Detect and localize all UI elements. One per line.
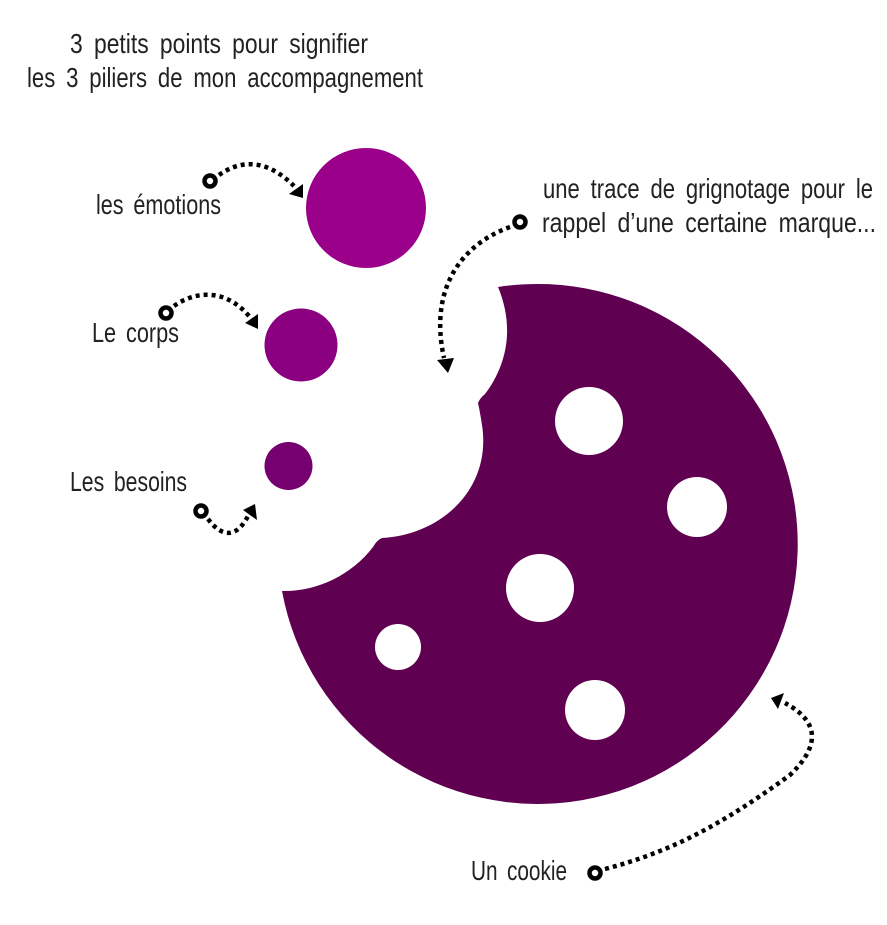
arrow: un cookie (590, 693, 812, 878)
dot: le corps (264, 308, 338, 382)
cookie hole 3 (506, 554, 574, 622)
label: un cookie: Un cookie (471, 855, 567, 886)
cookie hole 2 (667, 477, 727, 537)
dot: les émotions (306, 148, 426, 268)
arrow: le corps (160, 295, 258, 329)
cookie (282, 284, 798, 804)
title: les 3 piliers de mon accompagnement (27, 62, 423, 93)
arrow: les besoins (196, 504, 257, 533)
dot: les besoins (264, 442, 312, 490)
arrow: les émotions (204, 164, 303, 198)
cookie hole 5 (565, 680, 625, 740)
label: les émotions: les émotions (96, 189, 221, 220)
label: trace de grignotage (542, 173, 876, 238)
label: les besoins: Les besoins (70, 466, 187, 497)
label: le corps: Le corps (92, 317, 179, 348)
title (27, 28, 423, 93)
arrow: trace de grignotage (437, 216, 526, 373)
cookie hole 1 (555, 387, 623, 455)
cookie hole 4 (375, 624, 421, 670)
title: 3 petits points pour signifier (70, 28, 368, 59)
